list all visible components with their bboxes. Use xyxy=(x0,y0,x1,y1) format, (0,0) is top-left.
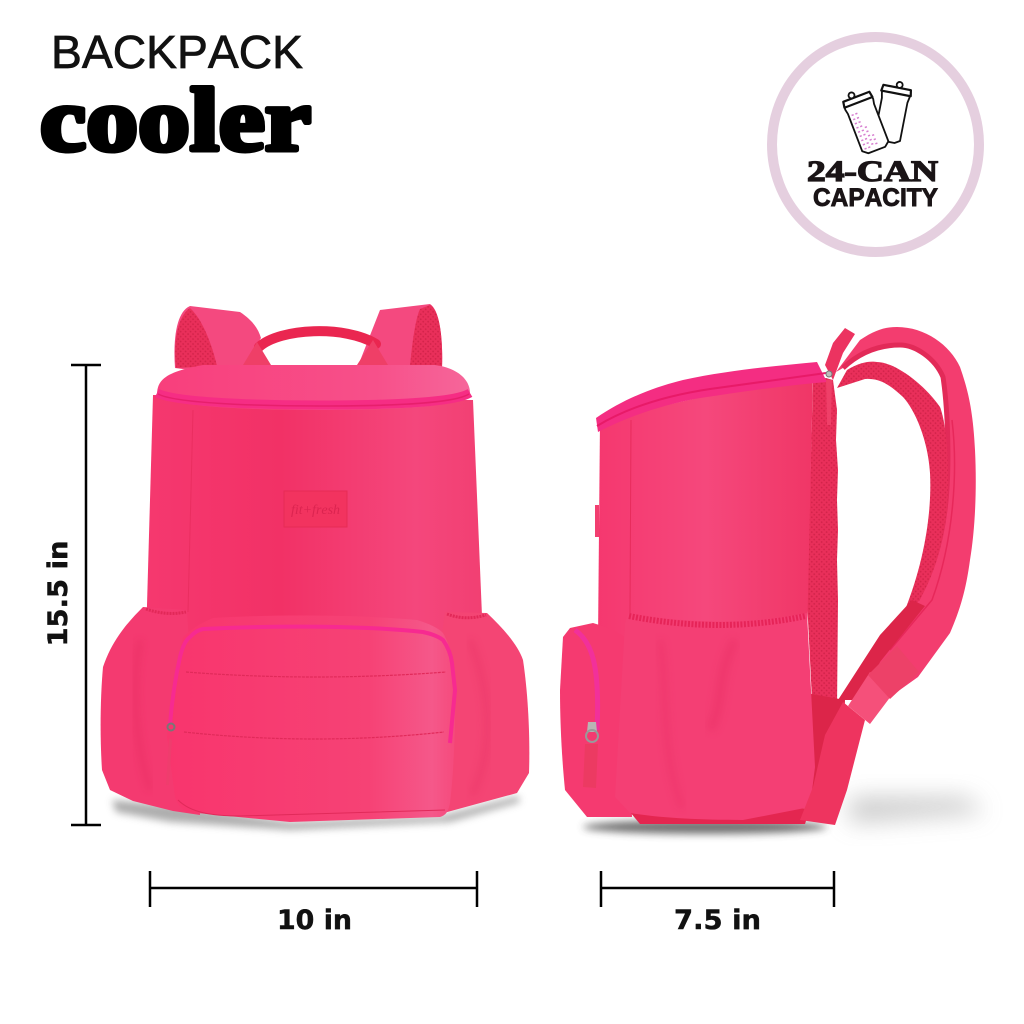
badge text: 24-CAN: 24-CAN xyxy=(807,155,938,188)
title line: BACKPACK: BACKPACK xyxy=(51,26,303,78)
side width dimension xyxy=(601,871,834,936)
logo text: fit+fresh xyxy=(291,503,340,518)
icon: soda cans xyxy=(840,79,913,155)
main body xyxy=(146,395,483,760)
side view backpack xyxy=(560,327,985,834)
outer shoulder strap xyxy=(836,327,976,697)
title line: cooler: cooler xyxy=(40,71,311,170)
right can xyxy=(872,79,913,144)
side body xyxy=(595,372,813,640)
label: 10 in: 10 in xyxy=(277,905,352,936)
title xyxy=(40,26,311,170)
lid with zipper xyxy=(596,362,827,432)
back mesh panel xyxy=(807,378,838,710)
badge text: CAPACITY: CAPACITY xyxy=(813,184,938,212)
right shoulder strap xyxy=(358,304,442,368)
lid with zipper xyxy=(157,365,470,410)
elastic side pocket xyxy=(615,613,815,820)
capacity badge xyxy=(772,37,979,252)
label: 15.5 in: 15.5 in xyxy=(43,540,74,646)
ground shadow xyxy=(583,798,985,834)
left shoulder strap xyxy=(174,306,261,370)
zipper pull on back xyxy=(826,371,832,425)
label: 7.5 in: 7.5 in xyxy=(674,905,761,936)
zipper pull xyxy=(166,724,174,785)
inner shoulder strap xyxy=(837,362,948,700)
logo patch xyxy=(284,491,347,527)
left side pocket xyxy=(101,607,200,815)
under-pocket webbing and shadow xyxy=(630,693,845,824)
small front pocket xyxy=(560,623,632,817)
carry handle xyxy=(243,331,388,365)
left can xyxy=(840,86,891,155)
front view backpack xyxy=(101,304,529,830)
right side pocket xyxy=(430,612,529,814)
ground shadow xyxy=(112,796,520,830)
front pocket xyxy=(166,616,455,822)
height dimension xyxy=(43,365,101,825)
top tab xyxy=(825,328,855,380)
lower webbing strap with buckle xyxy=(800,646,919,825)
zipper pull xyxy=(583,722,598,788)
front width dimension xyxy=(150,871,477,936)
